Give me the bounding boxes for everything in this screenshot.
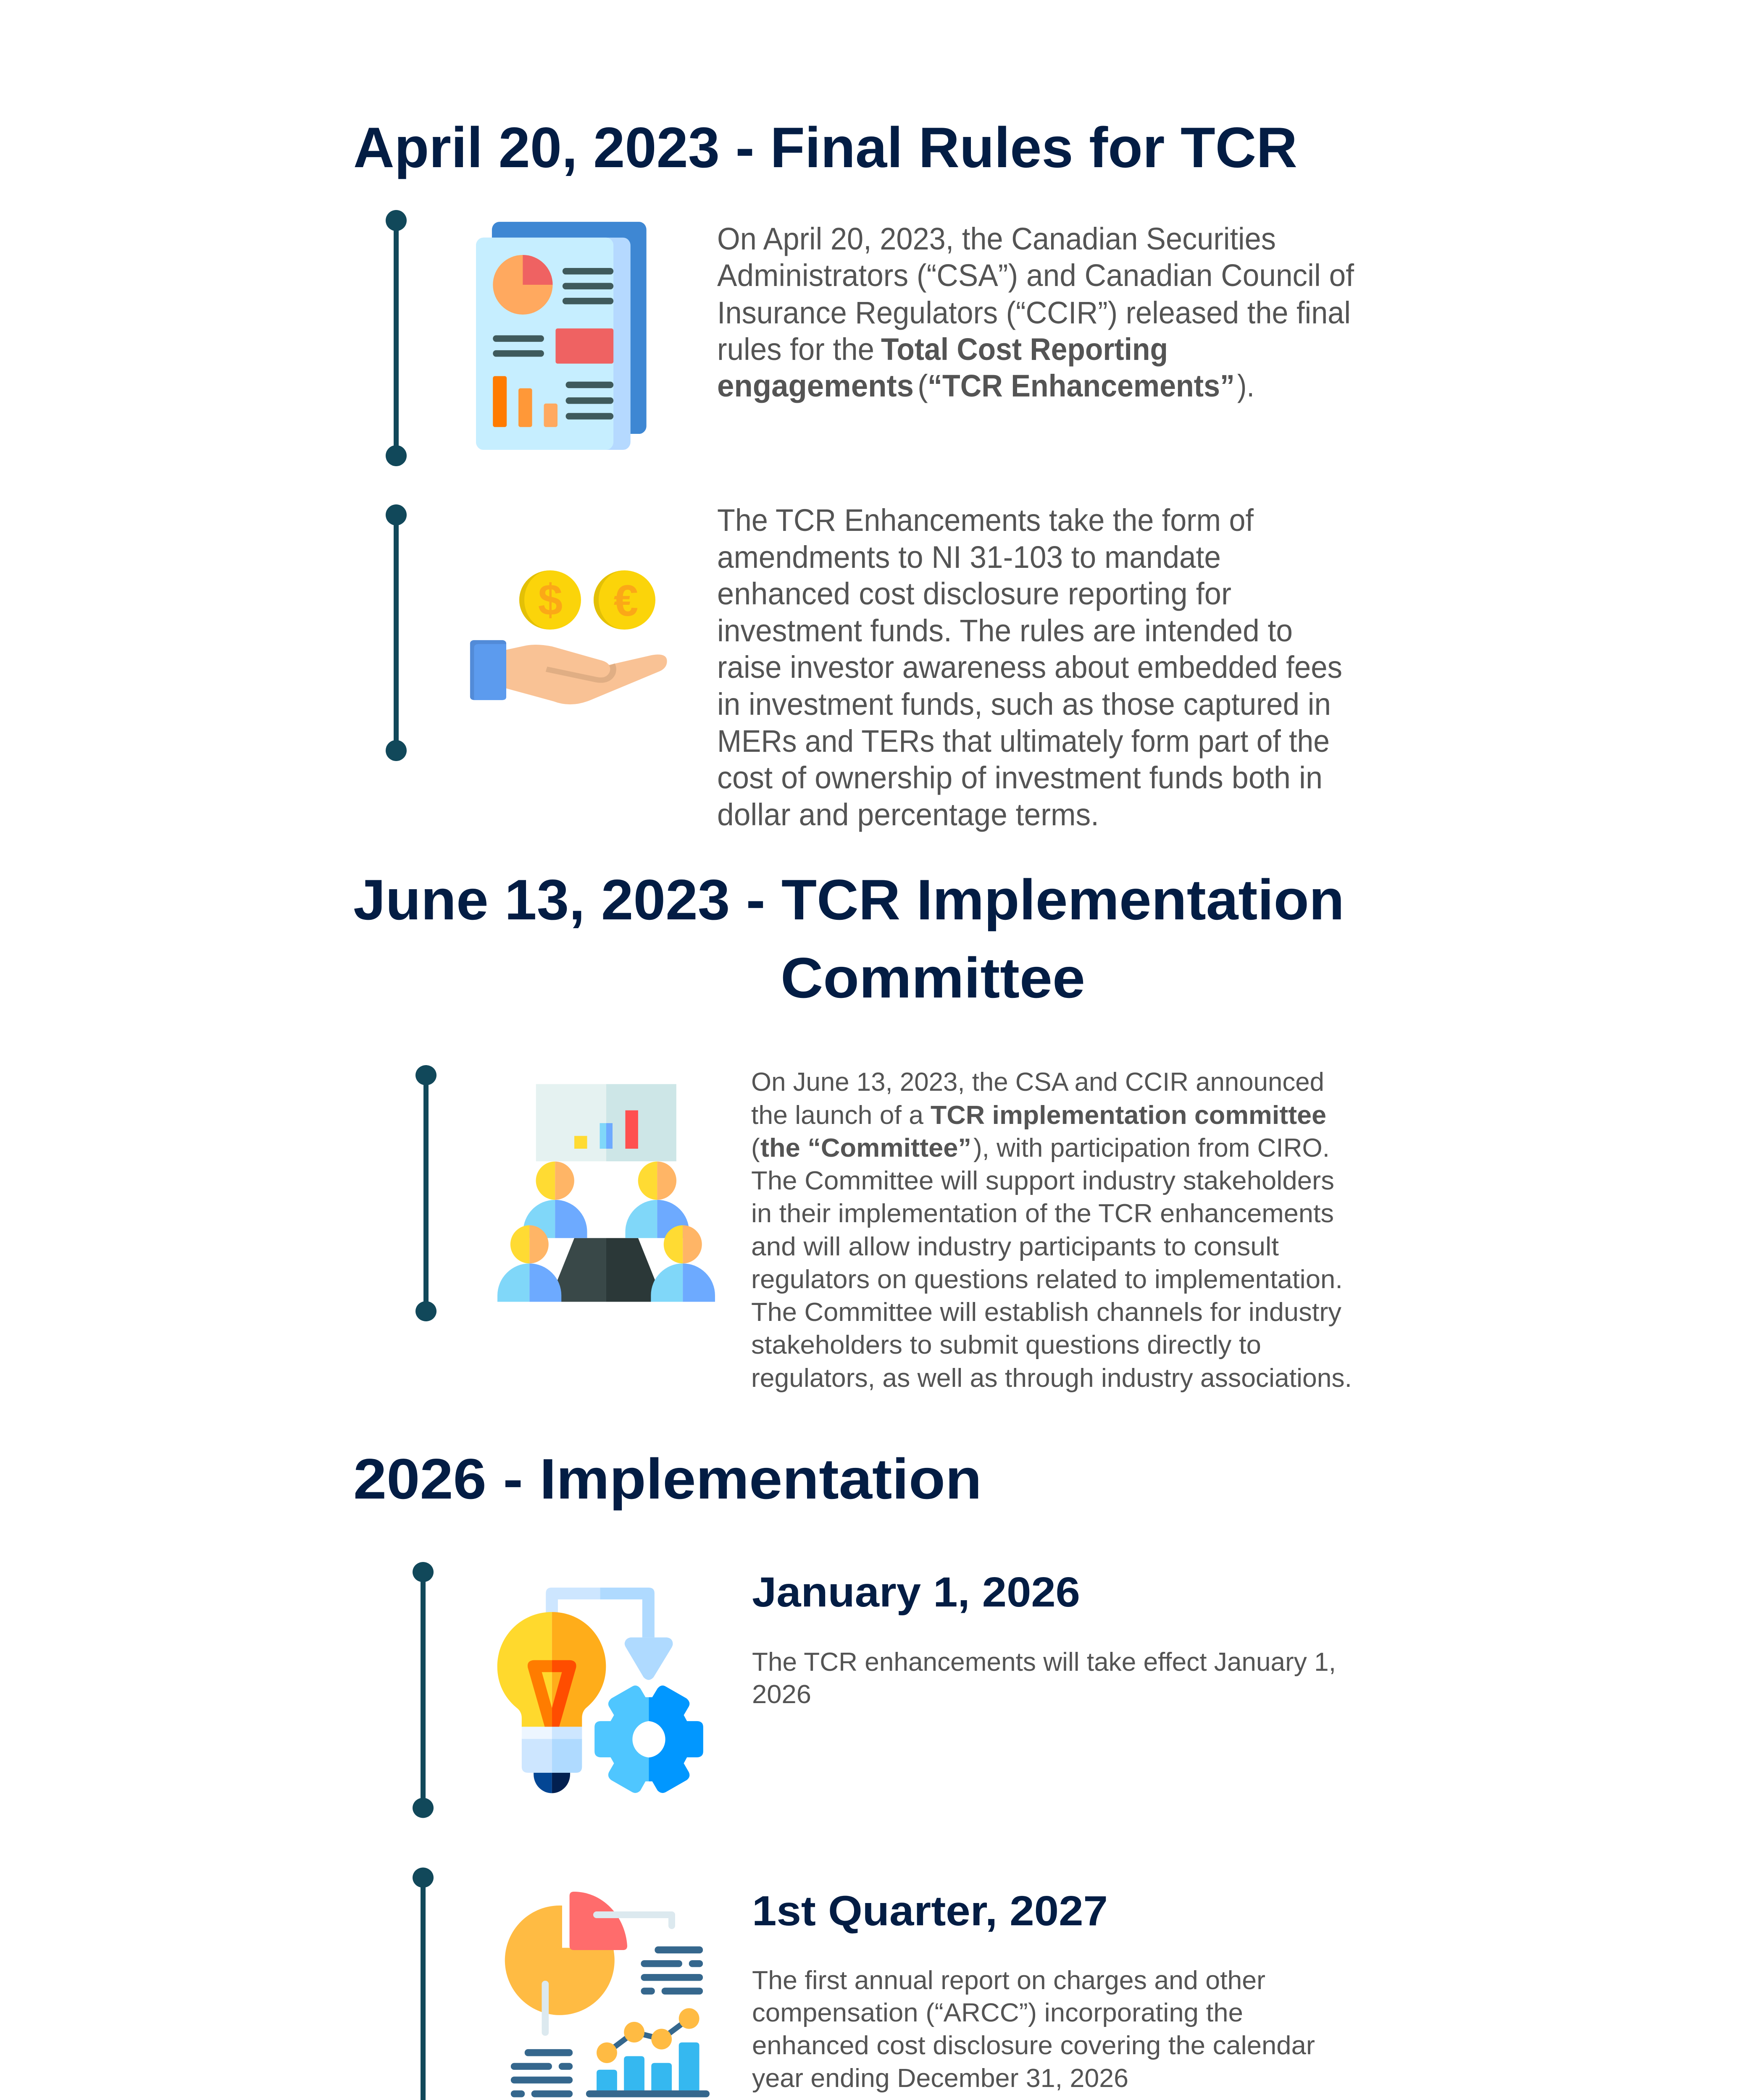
text block: first annual report: compensation (“ARCC”) incorporating the [752, 1998, 1243, 2027]
text block: final rules release: rules for the [717, 332, 874, 367]
text block: TCR enhancements description: The TCR Enhancements take the form of [717, 503, 1254, 538]
text block: final rules release: Total Cost Reporting [881, 332, 1168, 367]
text block: implementation committee: TCR implementation committee [931, 1101, 1326, 1130]
text block: first annual report: year ending December 31, 2026 [752, 2064, 1128, 2093]
text block: implementation committee: stakeholders to submit questions directly to [751, 1331, 1261, 1360]
icon: hand with coins: € [614, 576, 638, 625]
text block: final rules release: On April 20, 2023, the Canadian Securities [717, 221, 1276, 256]
text block: implementation committee: regulators, as well as through industry associations. [751, 1364, 1352, 1393]
text block: implementation committee: The Committee will establish channels for industry [751, 1298, 1341, 1327]
text block: final rules release: engagements [717, 368, 914, 403]
text block: final rules release [717, 221, 1354, 403]
text block: final rules release: Insurance Regulators (“CCIR”) released the final [717, 295, 1351, 330]
text block: TCR enhancements description [717, 503, 1342, 832]
text block: implementation committee: ( [751, 1134, 760, 1163]
text block: TCR enhancements description: investment funds. The rules are intended to [717, 613, 1293, 648]
text block: TCR enhancements description: MERs and TERs that ultimately form part of the [717, 724, 1330, 759]
text block: implementation committee: The Committee will support industry stakeholders [751, 1166, 1334, 1195]
text block: first annual report: The first annual report on charges and other [752, 1966, 1265, 1995]
text block: implementation committee: in their implementation of the TCR enhancements [751, 1199, 1334, 1228]
text block: first annual report [752, 1966, 1315, 2093]
icon: hand with coins [470, 570, 667, 704]
text block: January effective date: The TCR enhancements will take effect January 1, [752, 1648, 1336, 1677]
subheading: 1st Quarter, 2027: 1st Quarter, 2027 [752, 1887, 1108, 1935]
text block: implementation committee: and will allow industry participants to consult [751, 1232, 1279, 1261]
text block: TCR enhancements description: cost of ownership of investment funds both in [717, 760, 1323, 795]
text block: implementation committee: regulators on questions related to implementation. [751, 1265, 1343, 1294]
heading: June 13, 2023 [353, 868, 1344, 1010]
text block: January effective date [752, 1648, 1336, 1709]
text block: TCR enhancements description: enhanced cost disclosure reporting for [717, 576, 1231, 611]
text block: TCR enhancements description: amendments to NI 31-103 to mandate [717, 540, 1221, 575]
text block: final rules release: ). [1237, 368, 1254, 403]
text block: TCR enhancements description: in investment funds, such as those captured in [717, 687, 1331, 722]
heading: June 13, 2023: Committee [781, 946, 1085, 1010]
text block: implementation committee: ), with participation from CIRO. [973, 1134, 1330, 1163]
timeline marker 1 [386, 210, 407, 466]
subheading: January 1, 2026: January 1, 2026 [752, 1569, 1080, 1616]
heading: June 13, 2023: June 13, 2023 - TCR Implementation [353, 868, 1344, 932]
heading: April 20, 2023: April 20, 2023 - Final Rules for TCR [353, 116, 1297, 179]
icon: committee meeting [497, 1084, 715, 1302]
text block: final rules release: Administrators (“CSA”) and Canadian Council of [717, 258, 1354, 293]
text block: final rules release: “TCR Enhancements” [928, 368, 1235, 403]
text block: January effective date: 2026 [752, 1680, 811, 1709]
timeline marker 5 [413, 1867, 434, 2100]
text block: implementation committee: On June 13, 2023, the CSA and CCIR announced [751, 1068, 1324, 1097]
icon: charts and reports [505, 1892, 710, 2097]
text block: TCR enhancements description: dollar and percentage terms. [717, 797, 1099, 832]
icon: hand with coins: $ [538, 575, 563, 625]
text block: final rules release: ( [918, 368, 928, 403]
icon: report document [476, 222, 647, 450]
timeline marker 3 [415, 1065, 436, 1321]
icon: light bulb and gear [497, 1588, 703, 1793]
text block: implementation committee: the launch of a [751, 1101, 924, 1130]
heading: 2026 Implementation: 2026 - Implementation [353, 1447, 982, 1511]
timeline marker 2 [386, 504, 407, 761]
text block: implementation committee: the “Committee” [760, 1134, 971, 1163]
timeline marker 4 [413, 1562, 434, 1818]
text block: first annual report: enhanced cost disclosure covering the calendar [752, 2031, 1315, 2060]
text block: TCR enhancements description: raise investor awareness about embedded fees [717, 650, 1342, 685]
text block: implementation committee [751, 1068, 1352, 1393]
